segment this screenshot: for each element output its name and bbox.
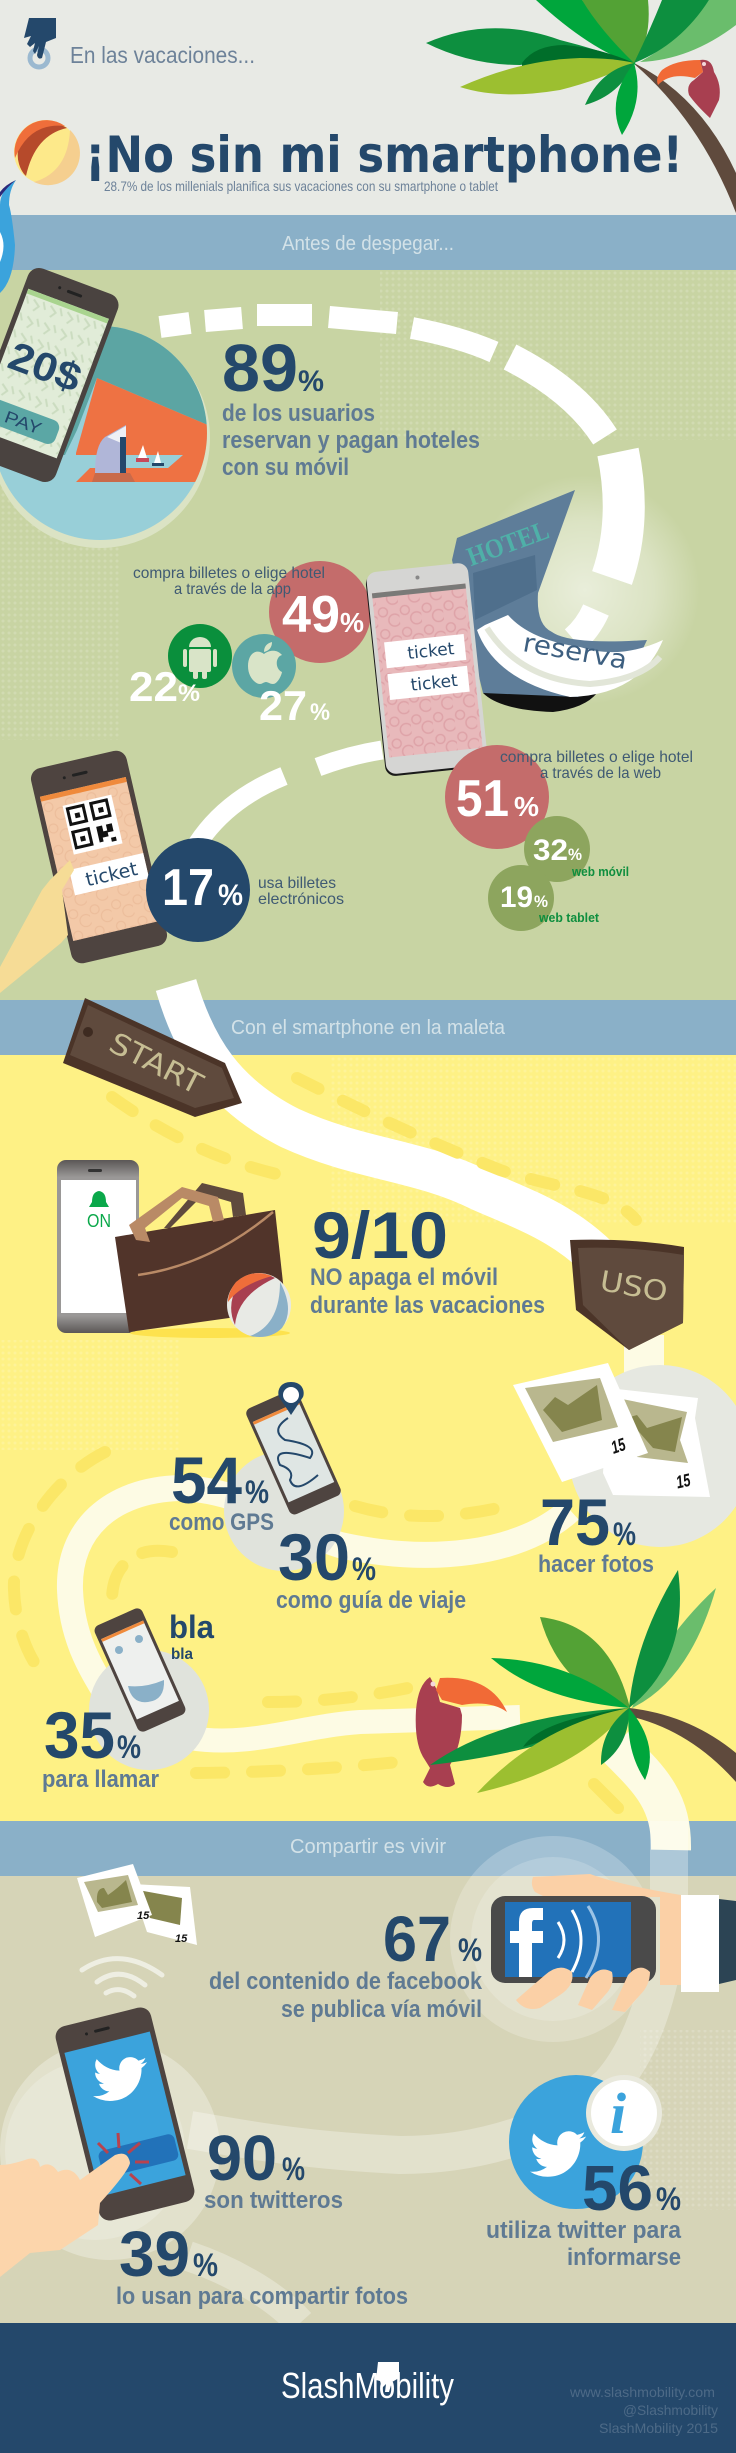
icon: apple circle [232,634,296,698]
illustration: top palm tree [426,0,736,213]
text: compra via app [133,565,325,598]
icon: slashmobility hand logo [24,18,56,67]
stat: 67% facebook: del contenido de facebook [209,1968,483,1995]
stat: 19% web tablet: % [534,892,548,911]
stat: 49% circle [269,561,371,663]
sign: uso [570,1240,684,1350]
illustration: phone 20$ pay: PAY [2,407,44,438]
stat: 9/10 [310,1198,545,1319]
subtitle: 28.7% de los millenials planifica sus vacaciones con su smartphone o tablet [104,178,498,194]
illustration: small photos [77,1864,197,1945]
illustration: phone 20$ pay [0,257,122,485]
text: compra via web [500,749,693,782]
illustration: reserva paper [477,615,663,697]
icon: twitter info circle [509,2075,662,2209]
illustration: fingers holding phone [516,1968,650,2012]
illustration: hotel sign: HOTEL [463,515,553,572]
illustration: grey circle behind GPS phone [224,1451,344,1571]
icon: android circle [168,624,232,688]
stat: 39% compartir fotos [116,2218,408,2310]
illustration: phone 20$ pay: 20$ [2,334,87,401]
road: dashed white path in green section [160,315,624,890]
stat: 90% twitteros [204,2122,343,2214]
illustration: silver phone with tickets: ticket [406,639,456,664]
road: wide white path from green to yellow section [176,985,610,1270]
illustration: twitter phone [53,2005,197,2223]
stat: 51% circle [445,745,549,849]
stat: 17% circle: 17 [162,859,214,917]
section band: con el smartphone en la maleta [0,1000,736,1055]
panel: antes de despegar background [0,270,736,1000]
illustration: small photos: 15 [137,1910,150,1922]
halftone texture [0,270,736,2210]
stat: 9/10: NO apaga el móvil [310,1264,498,1291]
stat: 56% twitter: % [656,2181,681,2217]
stat: 67% facebook: 67 [383,1903,451,1975]
stat: 22% [129,663,200,710]
stat: 27% [259,682,330,729]
illustration: GPS phone [244,1382,343,1516]
stat: 30% guia de viaje: % [352,1551,376,1587]
illustration: glow behind hotel [470,475,700,705]
panel: compartir background [0,1876,736,2323]
sign: uso: USO [597,1264,670,1309]
stat: 56% twitter: 56 [582,2152,653,2224]
stat: 39% compartir fotos: % [193,2247,218,2283]
panel: header background [0,0,736,215]
illustration: bottom palm tree [430,1570,736,1793]
stat: 75% hacer fotos: % [613,1516,636,1552]
icon: blue swoosh [0,180,16,293]
illustration: twitter phone halo [0,2040,220,2260]
stat: 75% hacer fotos [538,1485,654,1578]
stat: 54% como GPS: como GPS [169,1509,274,1536]
panel: maleta background [0,1055,736,1821]
text: bla bla [169,1609,214,1663]
stat: 67% facebook [209,1903,483,2023]
stat: 9/10: durante las vacaciones [310,1292,545,1319]
illustration: hand holding phone [0,860,74,993]
illustration: pointing hand [0,2154,130,2277]
icon: beach ball [14,120,80,185]
stat: 27%: % [310,699,330,726]
illustration: QR ticket phone: ticket [83,858,140,891]
stat: 35% para llamar: % [117,1729,141,1765]
stat: 54% como GPS: % [245,1474,269,1510]
text: compra via app: compra billetes o elige hotel [133,565,325,582]
stat: 51% circle: 51 [456,770,509,828]
road: yellow dashes [14,1078,636,1808]
illustration: facebook phone [491,1896,656,1983]
illustration: hotel sign [452,490,647,712]
text: compra via web: compra billetes o elige hotel [500,749,693,766]
text: compra via web: a través de la web [540,765,661,782]
text: compra via app: a través de la app [174,581,291,598]
illustration: QR ticket phone [29,749,169,965]
stat: 30% guia de viaje: como guía de viaje [276,1587,466,1614]
stat: 89% hotels: 89 [222,331,298,406]
stat: 56% twitter: utiliza twitter para [486,2217,682,2244]
stat: 89% hotels: de los usuarios [222,400,375,427]
stat: 90% twitteros: son twitteros [204,2187,343,2214]
section band: antes de despegar [0,215,736,270]
stat: 67% facebook: se publica vía móvil [281,1996,482,2023]
icon: twitter info circle: i [610,2081,626,2146]
stat: 89% hotels: % [298,365,324,398]
illustration: reserva paper: reserva [521,628,629,676]
illustration: hotel payment circle [0,326,210,548]
stat: 19% web tablet: 19 [500,881,533,914]
stat: 54% como GPS [169,1443,274,1536]
road: cream path through yellow section [70,1335,671,1850]
illustration: photos: 15 [609,1434,629,1458]
illustration: silver phone with tickets [365,562,489,777]
stat: 17% circle [146,838,250,942]
stat: 27%: 27 [259,682,307,729]
text: usa billetes electronicos [258,875,344,908]
stat: 49% circle: % [340,607,364,638]
stat: 35% para llamar: para llamar [42,1766,159,1793]
stat: 89% hotels: con su móvil [222,454,349,481]
stat: 56% twitter: informarse [567,2244,681,2271]
stat: 19% web tablet [488,865,600,931]
illustration: shirt cuff [681,1895,736,1992]
illustration: phone ON: ON [87,1211,111,1231]
illustration: photos: 15 [674,1470,693,1492]
stat: 89% hotels: reservan y pagan hoteles [222,427,480,454]
illustration: facebook halo [450,1836,656,2042]
illustration: phone ON [57,1160,139,1333]
text: usa billetes electronicos: usa billetes [258,875,336,892]
stat: 90% twitteros: 90 [207,2122,277,2194]
stat: 22%: % [178,680,200,707]
footer [0,2323,736,2453]
illustration: bla phone [93,1606,187,1734]
stat: 67% facebook: % [458,1932,482,1968]
text: bla bla: bla [169,1609,214,1645]
stat: 9/10: 9/10 [312,1198,448,1272]
road: translucent path through compartir section [188,1821,669,2323]
section band: con el smartphone en la maleta: Con el smartphone en la maleta [231,1017,506,1039]
illustration: silver phone with tickets: ticket [410,671,459,696]
illustration: grey circle behind photos [569,1365,736,1547]
sign: start [63,998,242,1117]
illustration: briefcase [115,1183,290,1338]
icon: beach ball small [227,1273,291,1337]
stat: 90% twitteros: % [282,2151,305,2187]
stat: 39% compartir fotos: lo usan para compartir fotos [116,2283,408,2310]
stat: 17% circle: % [218,879,243,912]
illustration: small photos: 15 [175,1933,188,1945]
footer credits: www.slashmobility.com [569,2384,715,2400]
stat: 22%: 22 [129,663,178,710]
stat: 35% para llamar: 35 [44,1698,115,1772]
stat: 89% hotels [222,331,480,481]
stat: 30% guia de viaje: 30 [278,1520,350,1594]
stat: 19% web tablet: web tablet [538,910,600,925]
text: usa billetes electronicos: electrónicos [258,891,344,908]
stat: 56% twitter [486,2152,682,2271]
text: bla bla: bla [171,1646,193,1663]
stat: 39% compartir fotos: 39 [119,2218,190,2290]
stat: 75% hacer fotos: hacer fotos [538,1551,654,1578]
stat: 32% web movil: % [568,845,582,864]
icon: wifi arcs [82,1959,162,1996]
stat: 49% circle: 49 [282,586,340,644]
illustration: photos [513,1363,710,1497]
footer credits: @Slashmobility [623,2402,718,2418]
footer credits: SlashMobility 2015 [599,2420,718,2436]
stat: 75% hacer fotos: 75 [540,1485,610,1559]
footer logo: SlashMobility [281,2365,454,2406]
stat: 51% circle: % [514,791,539,822]
stat: 35% para llamar [42,1698,159,1793]
footer credits [569,2384,718,2436]
illustration: top toucan [657,60,720,118]
section band: compartir es vivir: Compartir es vivir [290,1836,446,1858]
stat: 30% guia de viaje [276,1520,466,1614]
stat: 32% web movil: web móvil [571,864,629,879]
stat: 32% web movil [524,816,629,882]
sign: start: START [104,1026,209,1101]
illustration: hand top and arm [532,1874,681,1985]
illustration: grey circle behind bla phone [89,1650,209,1770]
title: ¡No sin mi smartphone! [85,126,683,184]
section band: compartir es vivir [0,1821,736,1876]
heading: en las vacaciones: En las vacaciones... [70,42,255,68]
section band: antes de despegar: Antes de despegar... [282,233,454,255]
stat: 54% como GPS: 54 [171,1443,242,1517]
stat: 32% web movil: 32 [533,834,568,867]
illustration: toucan [416,1677,507,1787]
